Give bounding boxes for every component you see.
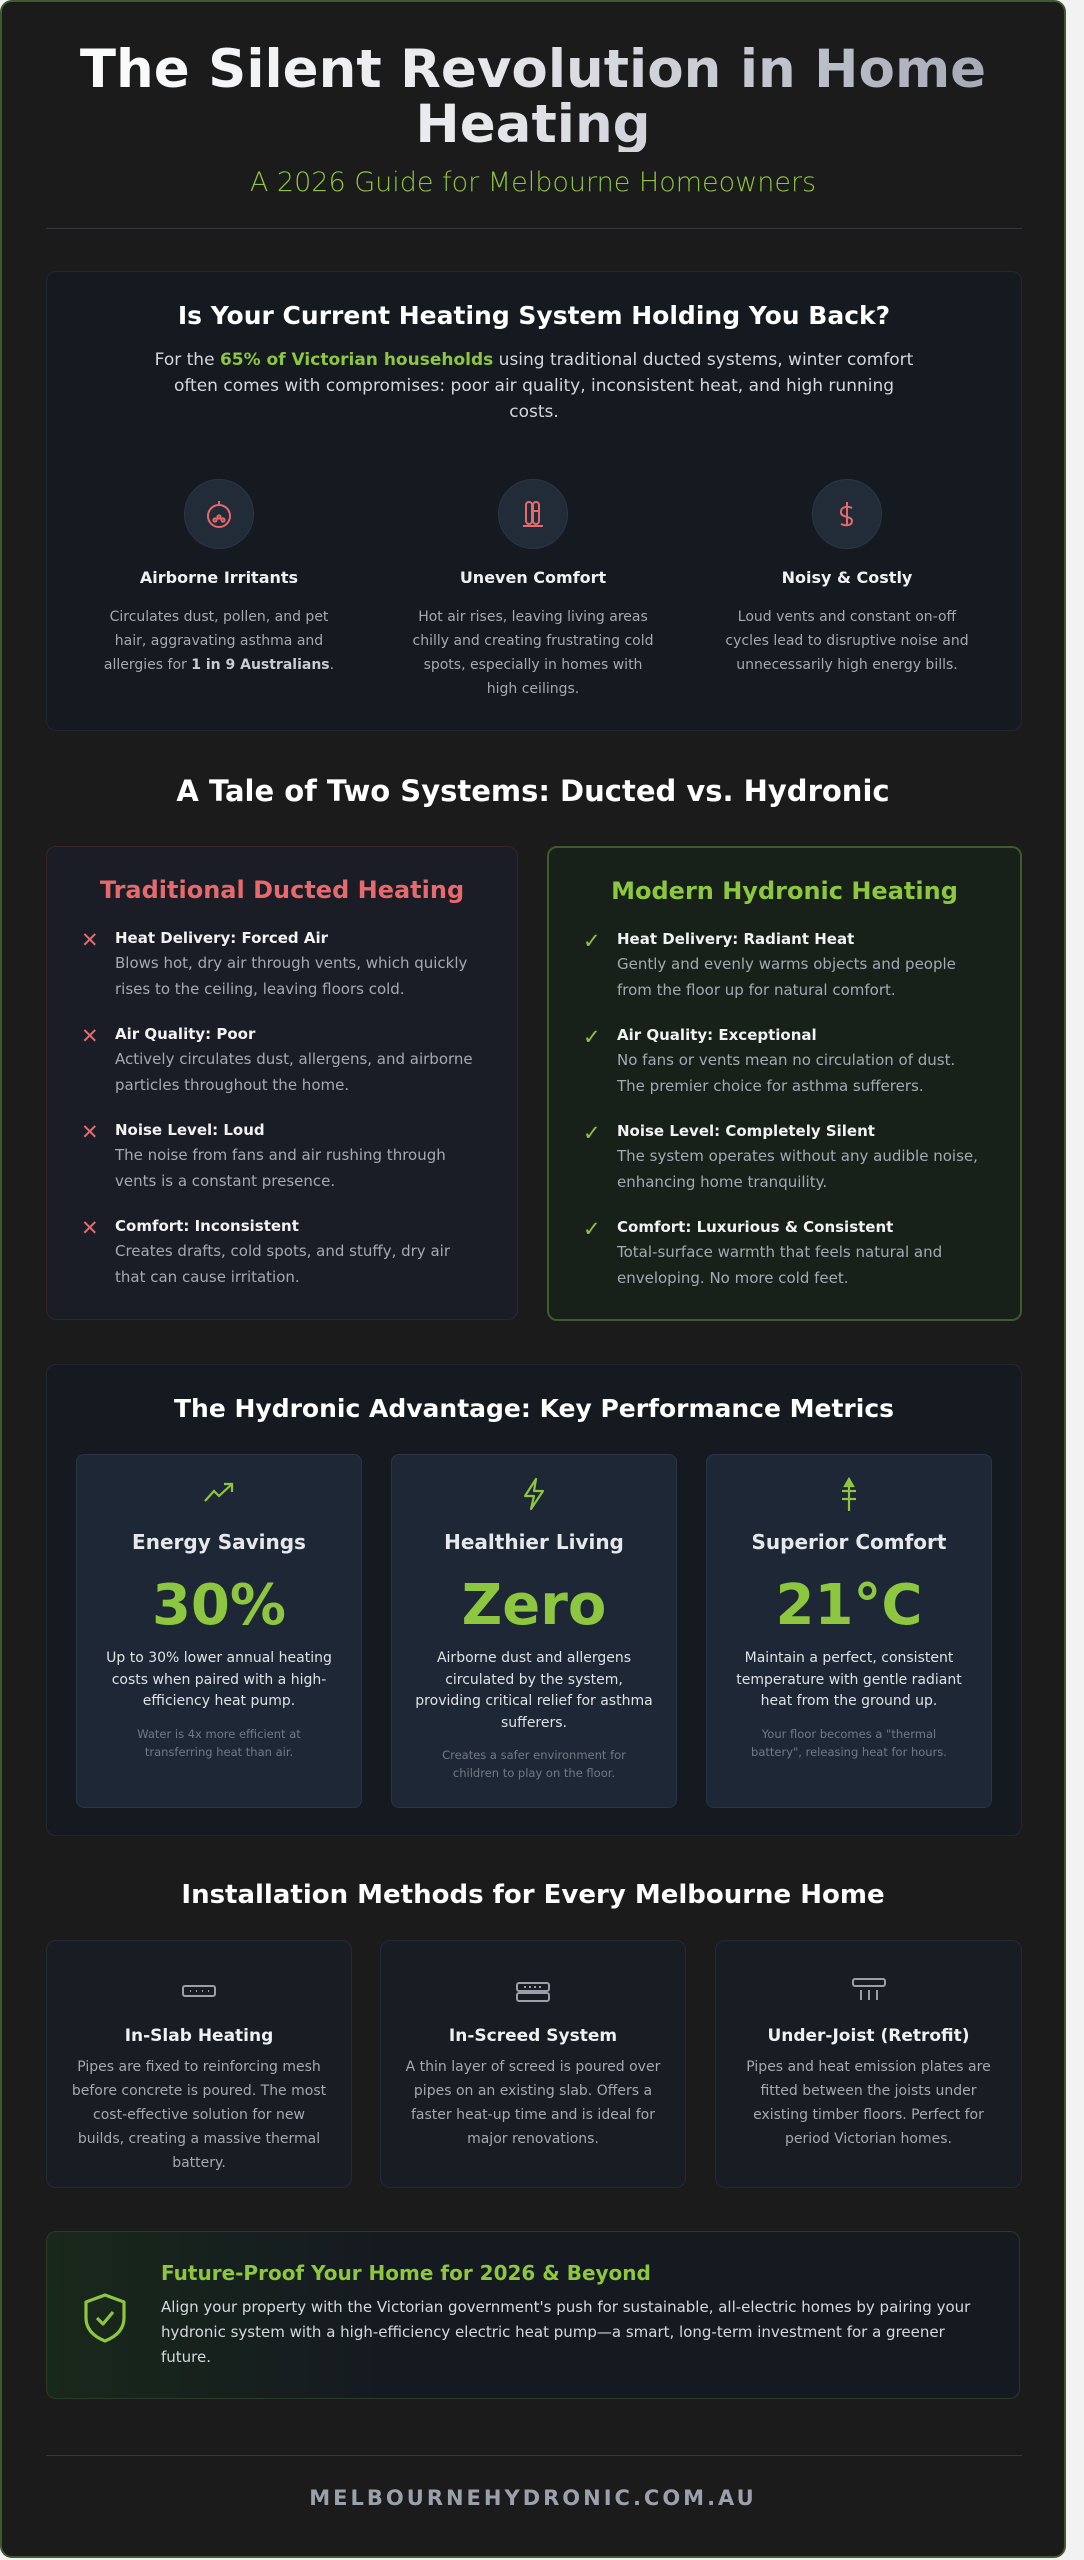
card: in-screed system: In-Screed System bbox=[449, 2026, 617, 2046]
problem: noisy and costly: Loud vents and constant on-off cycles lead to disruptive noise and unnecessarily high energy bills. bbox=[725, 609, 969, 673]
metric: healthier living: Airborne dust and allergens circulated by the system, providing critical relief for asthma sufferers. bbox=[415, 1650, 653, 1730]
metric: energy savings: Water is 4x more efficient at transferring heat than air. bbox=[137, 1726, 301, 1758]
icon: slab bbox=[182, 1985, 216, 1997]
card: in-slab heating bbox=[46, 1940, 352, 2188]
list: hydronic items: ✓ bbox=[583, 1121, 601, 1145]
list: ducted items: ✕ bbox=[81, 1024, 99, 1048]
icon: joist bbox=[852, 1978, 886, 2000]
panel: hydronic heating bbox=[547, 846, 1022, 1321]
list: ducted items: ✕ bbox=[81, 928, 99, 952]
list: ducted items: Blows hot, dry air through vents, which quickly rises to the ceiling, leaving floors cold. bbox=[115, 954, 467, 998]
heading: ducted: Traditional Ducted Heating bbox=[100, 876, 464, 904]
problem: airborne irritants: Airborne Irritants bbox=[140, 568, 298, 587]
problem: uneven comfort bbox=[412, 479, 654, 697]
card: under-joist retrofit: Pipes and heat emission plates are fitted between the joists under existing timber floors. Perfect for period Victorian homes. bbox=[746, 2059, 991, 2147]
problem: airborne irritants: Circulates dust, pollen, and pet hair, aggravating asthma and allergies for 1 in 9 Australians. bbox=[104, 609, 334, 673]
panel: ducted heating bbox=[46, 846, 518, 1320]
list: hydronic items: Comfort: Luxurious & Consistent bbox=[617, 1218, 893, 1236]
heading: tale of two systems: A Tale of Two Systems: Ducted vs. Hydronic bbox=[176, 774, 890, 808]
list: hydronic items: ✓ bbox=[583, 929, 601, 953]
icon: screed bbox=[516, 1982, 550, 2002]
card: under-joist retrofit bbox=[715, 1940, 1022, 2188]
icon: trend up bbox=[204, 1482, 234, 1502]
list: hydronic items: Noise Level: Completely Silent bbox=[617, 1122, 875, 1140]
metric: energy savings: 30% bbox=[152, 1573, 286, 1638]
list: ducted items: Air Quality: Poor bbox=[115, 1025, 255, 1043]
list: hydronic items: Heat Delivery: Radiant Heat bbox=[617, 930, 854, 948]
list: ducted items: Heat Delivery: Forced Air bbox=[115, 929, 328, 947]
heading: installation methods: Installation Methods for Every Melbourne Home bbox=[181, 1880, 885, 1910]
heading: holding you back: Is Your Current Heating System Holding You Back? bbox=[178, 301, 890, 330]
card: in-slab heating: Pipes are fixed to reinforcing mesh before concrete is poured. The most cost-effective solution for new builds, creating a massive thermal battery. bbox=[72, 2059, 326, 2171]
list: hydronic items: No fans or vents mean no circulation of dust. The premier choice for asthma sufferers. bbox=[617, 1051, 955, 1095]
list: ducted items bbox=[81, 928, 473, 1286]
list: ducted items: Noise Level: Loud bbox=[115, 1121, 265, 1139]
problem: noisy and costly: Noisy & Costly bbox=[782, 568, 912, 587]
title: The Silent Revolution in Home Heating bbox=[80, 39, 986, 155]
metric: healthier living: Creates a safer environment for children to play on the floor. bbox=[442, 1748, 626, 1780]
callout heading: Future-Proof Your Home for 2026 & Beyond bbox=[161, 2261, 651, 2285]
panel: current system problems bbox=[46, 271, 1022, 731]
subtitle: A 2026 Guide for Melbourne Homeowners bbox=[250, 167, 816, 198]
intro paragraph: For the 65% of Victorian households using traditional ducted systems, winter comfort often comes with compromises: poor air quality, inconsistent heat, and high running costs. bbox=[155, 350, 913, 422]
metric: superior comfort: Maintain a perfect, consistent temperature with gentle radiant heat from the ground up. bbox=[736, 1650, 962, 1709]
problem: uneven comfort: Uneven Comfort bbox=[460, 568, 606, 587]
heading: metrics: The Hydronic Advantage: Key Performance Metrics bbox=[174, 1394, 894, 1423]
callout text: Align your property with the Victorian government's push for sustainable, all-electric homes by pairing your hydronic system with a high-efficiency electric heat pump—a smart, long-term investment for a greener future. bbox=[161, 2298, 970, 2366]
icon: temperature bbox=[842, 1477, 856, 1511]
metric: healthier living: Healthier Living bbox=[444, 1530, 624, 1554]
metric: healthier living: Zero bbox=[462, 1573, 606, 1638]
list: hydronic items: ✓ bbox=[583, 1025, 601, 1049]
list: ducted items: Comfort: Inconsistent bbox=[115, 1217, 299, 1235]
list: ducted items: Actively circulates dust, allergens, and airborne particles throughout the home. bbox=[115, 1050, 473, 1094]
metric: superior comfort bbox=[706, 1454, 992, 1808]
callout: future-proof bbox=[46, 2231, 1020, 2399]
list: hydronic items: Total-surface warmth that feels natural and enveloping. No more cold feet. bbox=[617, 1243, 942, 1287]
icon: irritants bbox=[184, 479, 254, 549]
panel: key performance metrics bbox=[46, 1364, 1022, 1836]
list: hydronic items: ✓ bbox=[583, 1217, 601, 1241]
list: ducted items: Creates drafts, cold spots, and stuffy, dry air that can cause irritation. bbox=[115, 1242, 450, 1286]
list: ducted items: ✕ bbox=[81, 1216, 99, 1240]
metric: energy savings: Up to 30% lower annual heating costs when paired with a high-efficiency heat pump. bbox=[106, 1650, 332, 1709]
list: hydronic items: Air Quality: Exceptional bbox=[617, 1026, 817, 1044]
heading: hydronic: Modern Hydronic Heating bbox=[611, 877, 958, 905]
footer: website: MELBOURNEHYDRONIC.COM.AU bbox=[309, 2486, 757, 2510]
problem: airborne irritants bbox=[104, 479, 334, 673]
list: hydronic items: Gently and evenly warms objects and people from the floor up for natural comfort. bbox=[617, 955, 956, 999]
metric: superior comfort: 21°C bbox=[775, 1573, 923, 1638]
metric: superior comfort: Your floor becomes a "thermal battery", releasing heat for hours. bbox=[751, 1726, 947, 1758]
icon: lightning bbox=[524, 1478, 544, 1510]
card: in-slab heating: In-Slab Heating bbox=[125, 2026, 273, 2046]
icon: radiator bbox=[498, 479, 568, 549]
card: in-screed system: A thin layer of screed is poured over pipes on an existing slab. Offers a faster heat-up time and is ideal for major renovations. bbox=[406, 2059, 660, 2147]
metric: healthier living bbox=[391, 1454, 677, 1808]
metric: energy savings: Energy Savings bbox=[132, 1530, 306, 1554]
card: under-joist retrofit: Under-Joist (Retrofit) bbox=[767, 2026, 970, 2046]
list: ducted items: ✕ bbox=[81, 1120, 99, 1144]
list: hydronic items bbox=[583, 929, 978, 1287]
icon: shield bbox=[84, 2293, 126, 2343]
list: hydronic items: The system operates without any audible noise, enhancing home tranquility. bbox=[617, 1147, 978, 1191]
icon: cost bbox=[812, 479, 882, 549]
problem: uneven comfort: Hot air rises, leaving living areas chilly and creating frustrating cold spots, especially in homes with high ceilings. bbox=[412, 609, 654, 697]
metric: energy savings bbox=[76, 1454, 362, 1808]
problem: noisy and costly bbox=[725, 479, 969, 673]
metric: superior comfort: Superior Comfort bbox=[752, 1530, 946, 1554]
list: ducted items: The noise from fans and air rushing through vents is a constant presence. bbox=[115, 1146, 446, 1190]
card: in-screed system bbox=[380, 1940, 686, 2188]
